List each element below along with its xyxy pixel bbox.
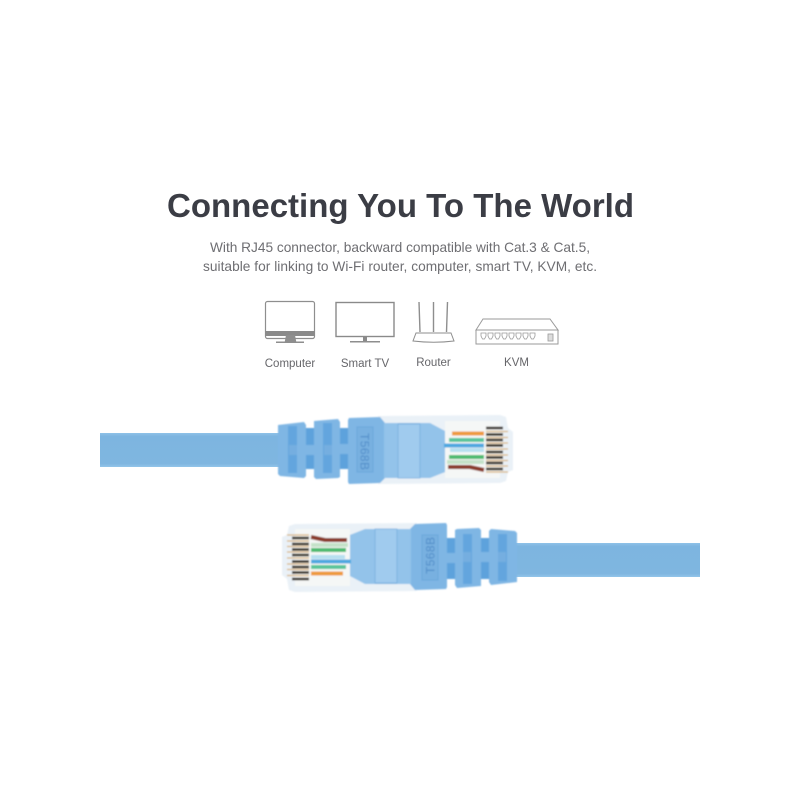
icon labels: Computer: [265, 358, 315, 370]
icon labels: Router: [416, 357, 451, 369]
icon labels: Smart TV: [341, 358, 390, 370]
icon row: [265, 302, 558, 344]
cable: bottom: [515, 543, 700, 577]
T568B label: T568B: [424, 537, 438, 574]
connector: bottom: [282, 523, 517, 592]
latch: [398, 424, 420, 478]
subtitle: [203, 240, 597, 274]
T568B label: T568B: [358, 433, 372, 470]
body: [348, 417, 445, 484]
connector: top: [278, 415, 513, 484]
icon: computer: [265, 302, 315, 343]
icon: KVM switch: [476, 319, 558, 344]
cable: top: [100, 433, 285, 467]
strain relief boot: [445, 528, 517, 588]
strain relief boot: [278, 419, 350, 479]
wires: [311, 537, 351, 574]
gold contacts: [292, 538, 309, 579]
icon labels: KVM: [504, 357, 529, 369]
icon: smart TV: [336, 302, 394, 342]
subtitle: suitable for linking to Wi-Fi router, computer, smart TV, KVM, etc.: [203, 259, 597, 274]
clear plug housing: [282, 523, 417, 592]
latch: [375, 529, 397, 583]
subtitle: With RJ45 connector, backward compatible with Cat.3 & Cat.5,: [210, 240, 590, 255]
translucent flanks: [384, 423, 445, 478]
icon labels: [265, 357, 529, 370]
body: [350, 523, 447, 590]
title: Connecting You To The World: [167, 187, 634, 224]
wires: [444, 434, 484, 470]
gold contacts: [486, 428, 503, 469]
icon: router: [413, 302, 454, 342]
clear plug housing: [378, 415, 513, 484]
translucent flanks: [350, 529, 411, 584]
